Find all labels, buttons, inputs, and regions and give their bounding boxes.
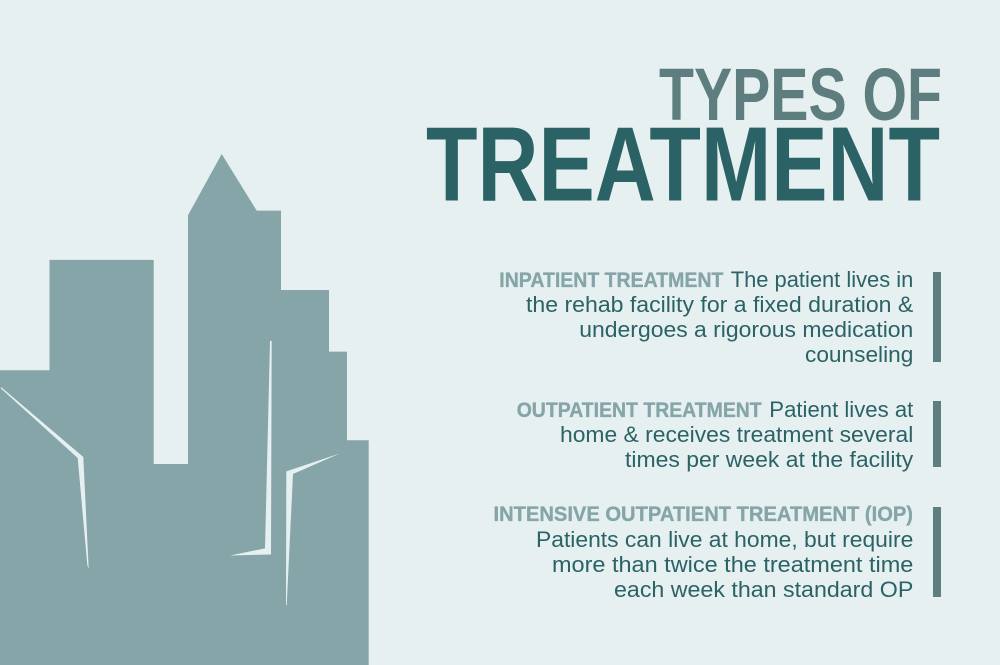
description: inpatient treatment: The patient lives in: [731, 267, 913, 292]
description: intensive outpatient treatment: [536, 527, 913, 602]
crack: centre building: [230, 341, 272, 556]
description: outpatient treatment: [560, 397, 913, 472]
crack: right building: [286, 453, 340, 605]
section: intensive outpatient treatment: [494, 502, 941, 602]
crack: left building: [1, 387, 89, 569]
accent bar: outpatient: [933, 401, 941, 467]
description: outpatient treatment: Patient lives at: [769, 397, 913, 422]
heading: inpatient treatment: INPATIENT TREATMENT: [499, 268, 723, 292]
accent bar: intensive outpatient: [933, 507, 941, 597]
description: outpatient treatment: home & receives treatment several: [560, 422, 913, 447]
section: inpatient treatment: [499, 267, 941, 367]
description: outpatient treatment: times per week at the facility: [625, 447, 913, 472]
accent bar: inpatient: [933, 272, 941, 362]
description: intensive outpatient treatment: more than twice the treatment time: [552, 552, 913, 577]
description: inpatient treatment: [526, 267, 914, 367]
heading: intensive outpatient treatment: INTENSIVE OUTPATIENT TREATMENT (IOP): [494, 502, 913, 526]
description: inpatient treatment: the rehab facility for a fixed duration &: [526, 292, 914, 317]
description: inpatient treatment: undergoes a rigorous medication: [579, 317, 913, 342]
heading: outpatient treatment: OUTPATIENT TREATMENT: [517, 398, 762, 422]
description: inpatient treatment: counseling: [805, 342, 913, 367]
skyline silhouette: [0, 154, 369, 665]
description: intensive outpatient treatment: Patients can live at home, but require: [536, 527, 913, 552]
section: outpatient treatment: [517, 397, 941, 472]
illustration: cracked city skyline: [0, 154, 369, 665]
title: [426, 53, 942, 224]
description: intensive outpatient treatment: each week than standard OP: [614, 577, 913, 602]
